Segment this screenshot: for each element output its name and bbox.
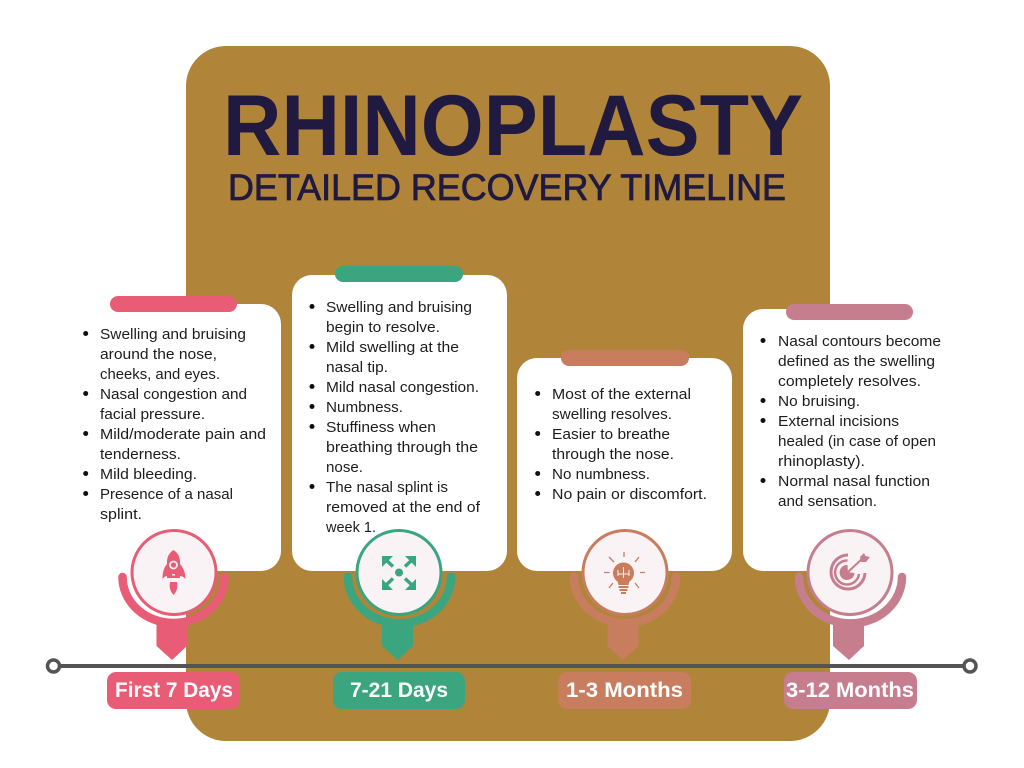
panel: 7-21 days card bbox=[292, 266, 507, 571]
first 7 days symptom list: Presence of a nasal bbox=[100, 486, 233, 503]
3-12 months symptom list: External incisions bbox=[778, 413, 899, 430]
label: 7-21 days: 7-21 Days bbox=[350, 679, 448, 702]
subtitle: DETAILED RECOVERY TIMELINE bbox=[228, 167, 786, 208]
first 7 days symptom list: cheeks, and eyes. bbox=[100, 366, 220, 383]
3-12 months symptom list: Normal nasal function bbox=[778, 473, 930, 490]
3-12 months symptom list: healed (in case of open bbox=[778, 433, 936, 450]
3-12 months symptom list: completely resolves. bbox=[778, 373, 921, 390]
1-3 months symptom list: No numbness. bbox=[552, 466, 650, 483]
7-21 days symptom list: breathing through the bbox=[326, 439, 478, 456]
icon: rocket bbox=[162, 550, 186, 595]
panel: first 7 days card bbox=[66, 296, 281, 571]
1-3 months symptom list: swelling resolves. bbox=[552, 406, 672, 423]
7-21 days symptom list: nose. bbox=[326, 459, 363, 476]
3-12 months symptom list: and sensation. bbox=[778, 493, 877, 510]
first 7 days symptom list: splint. bbox=[100, 506, 142, 523]
panel: 3-12 months card bbox=[743, 304, 958, 571]
label: first 7 days bbox=[107, 672, 240, 709]
7-21 days symptom list: Swelling and bruising bbox=[326, 299, 472, 316]
marker: 7-21 days bbox=[348, 530, 451, 660]
background panel bbox=[186, 46, 830, 741]
first 7 days symptom list: Nasal congestion and bbox=[100, 386, 247, 403]
7-21 days symptom list: Mild nasal congestion. bbox=[326, 379, 479, 396]
1-3 months symptom list: No pain or discomfort. bbox=[552, 486, 707, 503]
7-21 days symptom list: Numbness. bbox=[326, 399, 403, 416]
marker: 3-12 months bbox=[799, 530, 902, 660]
marker: first 7 days bbox=[122, 530, 224, 660]
first 7 days symptom list: tenderness. bbox=[100, 446, 181, 463]
7-21 days symptom list: Mild swelling at the bbox=[326, 339, 459, 356]
label: 1-3 months bbox=[558, 672, 691, 709]
7-21 days symptom list: Stuffiness when bbox=[326, 419, 436, 436]
label: 7-21 days bbox=[333, 672, 465, 709]
first 7 days symptom list: Swelling and bruising bbox=[100, 326, 246, 343]
1-3 months symptom list: Most of the external bbox=[552, 386, 691, 403]
7-21 days symptom list: removed at the end of bbox=[326, 499, 481, 516]
timeline axis bbox=[48, 660, 976, 672]
1-3 months symptom list: Easier to breathe bbox=[552, 426, 670, 443]
first 7 days symptom list: Mild bleeding. bbox=[100, 466, 197, 483]
7-21 days symptom list: nasal tip. bbox=[326, 359, 388, 376]
7-21 days symptom list: begin to resolve. bbox=[326, 319, 440, 336]
label: 3-12 months bbox=[784, 672, 917, 709]
3-12 months symptom list: defined as the swelling bbox=[778, 353, 935, 370]
first 7 days symptom list: facial pressure. bbox=[100, 406, 205, 423]
1-3 months symptom list: through the nose. bbox=[552, 446, 674, 463]
first 7 days symptom list bbox=[83, 326, 266, 523]
7-21 days symptom list: The nasal splint is bbox=[326, 479, 448, 496]
label: 3-12 months: 3-12 Months bbox=[786, 679, 914, 702]
7-21 days symptom list bbox=[310, 299, 481, 536]
label: 1-3 months: 1-3 Months bbox=[566, 679, 683, 702]
3-12 months symptom list: rhinoplasty). bbox=[778, 453, 865, 470]
3-12 months symptom list: No bruising. bbox=[778, 393, 860, 410]
first 7 days symptom list: Mild/moderate pain and bbox=[100, 426, 266, 443]
7-21 days symptom list: week 1. bbox=[325, 519, 376, 536]
icon: expanding arrows bbox=[382, 556, 416, 590]
marker: 1-3 months bbox=[574, 530, 676, 660]
label: first 7 days: First 7 Days bbox=[115, 679, 233, 702]
1-3 months symptom list bbox=[535, 386, 707, 503]
3-12 months symptom list: Nasal contours become bbox=[778, 333, 941, 350]
panel: 1-3 months card bbox=[517, 350, 732, 571]
3-12 months symptom list bbox=[760, 333, 941, 510]
first 7 days symptom list: around the nose, bbox=[100, 346, 217, 363]
title: RHINOPLASTY bbox=[223, 78, 803, 174]
icon: light bulb bbox=[604, 552, 645, 593]
icon: target with dart bbox=[831, 553, 870, 589]
